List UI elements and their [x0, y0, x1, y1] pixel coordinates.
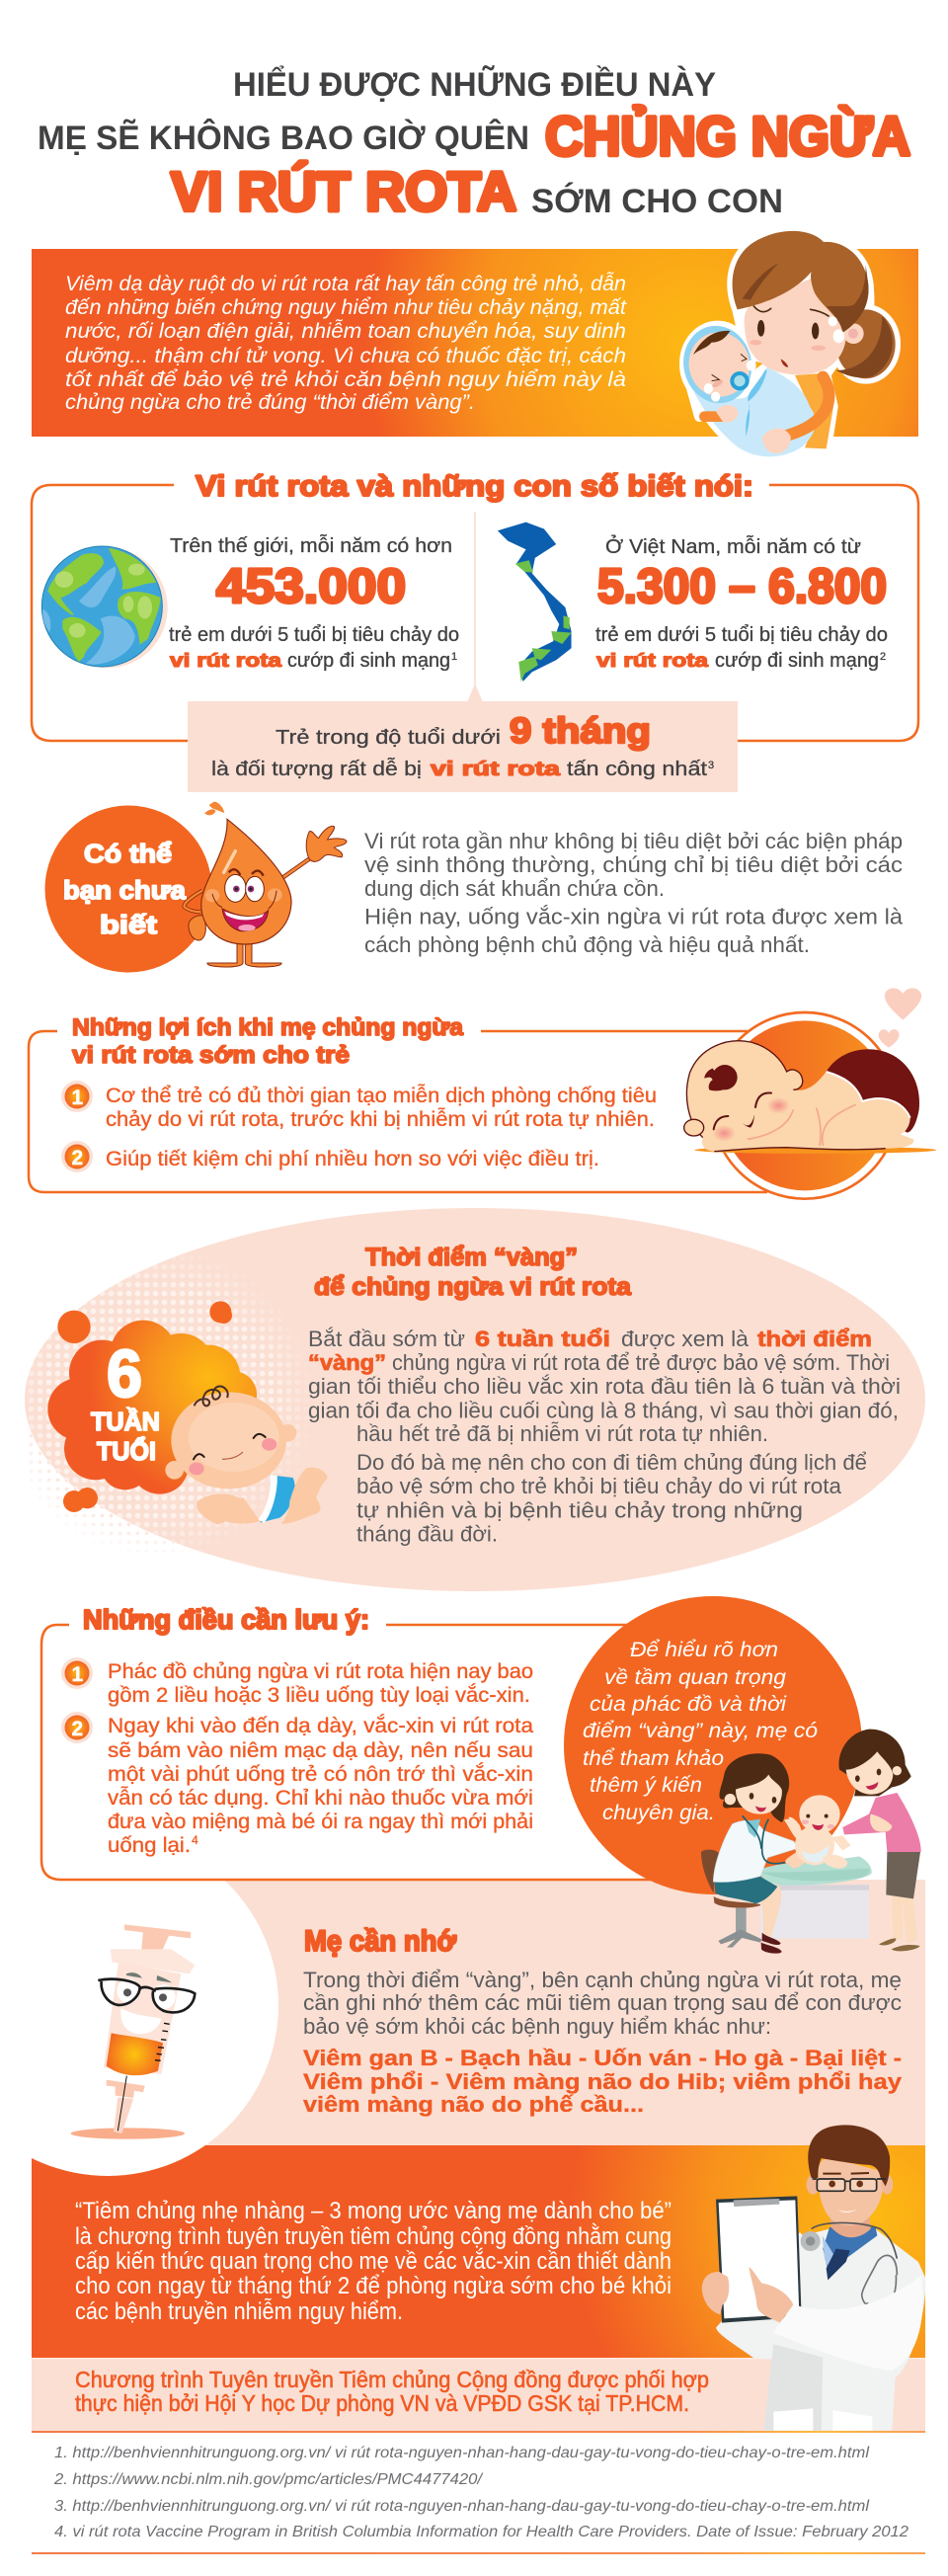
callout: 9 months: 9 tháng — [510, 710, 651, 751]
did-you-know text: dung dịch sát khuẩn chứa cồn. — [364, 876, 665, 901]
notes text: một vài phút uống trẻ có nôn trớ thì vắc-xin — [108, 1763, 533, 1786]
notes text: vẫn có tác dụng. Chỉ khi nào thuốc vừa mới — [108, 1787, 533, 1810]
callout: orange circle — [564, 1596, 862, 1894]
badge: 2: 2 — [71, 1147, 83, 1169]
remember text: Viêm phổi - Viêm màng não do Hib; viêm phổi hay — [303, 2069, 903, 2094]
map: Vietnam — [498, 523, 572, 682]
panel: did you know — [45, 802, 904, 972]
world statistic: Trên thế giới, mỗi năm có hơn — [170, 534, 452, 557]
programme description: các bệnh truyền nhiễm nguy hiểm. — [75, 2298, 403, 2325]
remember text: cần ghi nhớ thêm các mũi tiêm quan trọng sau để con được — [303, 1990, 902, 2015]
golden time text: tháng đầu đời. — [356, 1521, 498, 1547]
programme credit: Chương trình Tuyên truyền Tiêm chủng Cộng đồng được phối hợp — [75, 2367, 709, 2392]
programme description: cho con ngay từ tháng thứ 2 để phòng ngừa sớm cho bé khỏi — [75, 2273, 672, 2299]
icon: doctor with clipboard — [702, 2125, 925, 2431]
remember text: bảo vệ sớm khỏi các bệnh nguy hiểm khác như: — [303, 2014, 771, 2039]
world statistic: vi rút rota — [170, 650, 281, 672]
badge: 2 — [61, 1712, 93, 1743]
icon: orange cloud with 6 weeks and baby: 6 — [107, 1336, 142, 1411]
references — [53, 2445, 908, 2540]
golden time text: tự nhiên và bị bệnh tiêu chảy trong những — [356, 1497, 803, 1523]
callout: 9 months — [188, 684, 738, 792]
white circle behind syringe — [0, 1834, 278, 2176]
intro text: chủng ngừa cho trẻ đúng “thời điểm vàng”. — [65, 390, 475, 414]
benefit items: Cơ thể trẻ có đủ thời gian tạo miễn dịch phòng chống tiêu — [106, 1085, 657, 1107]
badge: 1 — [61, 1081, 93, 1112]
Vietnam statistic: trẻ em dưới 5 tuổi bị tiêu chảy do — [595, 623, 888, 646]
remember text: Mẹ cần nhớ — [304, 1925, 457, 1958]
callout: orange circle: của phác đồ và thời — [590, 1692, 787, 1716]
remember text — [303, 1925, 903, 2117]
golden time text: Do đó bà mẹ nên cho con đi tiêm chủng đúng lịch để — [356, 1450, 867, 1475]
world statistic: cướp đi sinh mạng — [287, 649, 450, 672]
remember text: Trong thời điểm “vàng”, bên cạnh chủng ngừa vi rút rota, mẹ — [303, 1968, 902, 1992]
callout: 9 months: 3 — [708, 760, 714, 771]
world statistic — [169, 534, 459, 672]
decorative halftone outside ellipse — [30, 1434, 183, 1553]
programme description — [75, 2198, 672, 2325]
notes text: 4 — [192, 1833, 198, 1847]
panel: intro banner — [32, 249, 918, 437]
title — [38, 66, 910, 222]
Vietnam statistic: vi rút rota — [596, 650, 708, 672]
intro text: tốt nhất để bảo vệ trẻ khỏi căn bệnh nguy hiểm này là — [65, 367, 626, 391]
benefits heading: Những lợi ích khi mẹ chủng ngừa — [72, 1014, 464, 1041]
callout: orange circle: thêm ý kiến — [590, 1773, 702, 1797]
golden time text: gian tối đa cho liều cuối cùng là 8 tháng, vì sau thời gian đó, — [308, 1399, 899, 1422]
programme description: “Tiêm chủng nhẹ nhàng – 3 mong ước vàng mẹ dành cho bé” — [75, 2198, 672, 2224]
callout: orange circle: về tầm quan trọng — [604, 1665, 786, 1689]
callout: 9 months: vi rút rota — [431, 759, 561, 780]
section heading: Vi rút rota và những con số biết nói: — [196, 470, 753, 503]
icon: mother holding crying baby — [676, 231, 896, 456]
badge: 2 — [61, 1141, 93, 1172]
title: SỚM CHO CON — [531, 183, 783, 220]
programme credit — [75, 2367, 709, 2416]
references: 1. http://benhviennhitrunguong.org.vn/ vi rút rota-nguyen-nhan-hang-dau-gay-tu-vong-do-tieu-chay-o-tre-em.html — [54, 2445, 869, 2461]
badge: 1: 1 — [71, 1663, 83, 1686]
bottom rule — [32, 2431, 925, 2433]
benefit items: chảy do vi rút rota, trước khi bị nhiễm vi rút rota tự nhiên. — [106, 1108, 655, 1131]
icon: sleeping baby with hearts — [684, 988, 936, 1199]
callout: 9 months: Trẻ trong độ tuổi dưới — [276, 726, 501, 749]
badge: 1 — [61, 1657, 93, 1689]
Vietnam statistic: 5.300 – 6.800 — [597, 560, 887, 613]
icon: earth globe — [41, 546, 168, 668]
intro text: Viêm dạ dày ruột do vi rút rota rất hay tấn công trẻ nhỏ, dẫn — [65, 271, 626, 295]
notes heading: Những điều cần lưu ý: — [83, 1604, 369, 1635]
icon: drop mascot — [184, 802, 347, 967]
notes text: uống lại. — [108, 1834, 191, 1857]
did-you-know text: Vi rút rota gần như không bị tiêu diệt bởi các biện pháp — [364, 829, 903, 853]
title: MẸ SẼ KHÔNG BAO GIỜ QUÊN — [38, 119, 529, 157]
golden time heading: để chủng ngừa vi rút rota — [314, 1273, 632, 1301]
Vietnam statistic: Ở Việt Nam, mỗi năm có từ — [605, 534, 861, 558]
benefits heading — [72, 1014, 464, 1069]
references: 4. vi rút rota Vaccine Program in British Columbia Information for Health Care Providers. Date of Issue: February 2012 — [54, 2524, 908, 2540]
intro text: đến những biến chứng nguy hiểm như tiêu chảy nặng, mất — [65, 295, 627, 319]
panel: golden time — [0, 1208, 925, 1591]
programme credit: thực hiện bởi Hội Y học Dự phòng VN và VPĐD GSK tại TP.HCM. — [75, 2390, 689, 2416]
callout: orange circle: điểm “vàng” này, mẹ có — [583, 1719, 818, 1742]
callout: orange circle: Để hiểu rõ hơn — [630, 1638, 778, 1661]
notes text: đưa vào miệng mà bé ói ra ngay thì mới phải — [108, 1811, 533, 1833]
icon: doctor, baby and mother — [701, 1730, 921, 1954]
panel: numbers that speak — [32, 470, 918, 792]
remember text: Viêm gan B - Bạch hầu - Uốn ván - Ho gà - Bại liệt - — [303, 2046, 902, 2070]
references: 2. https://www.ncbi.nlm.nih.gov/pmc/articles/PMC4477420/ — [53, 2471, 484, 2488]
icon: orange cloud with 6 weeks and baby: TUẦN — [91, 1407, 160, 1436]
icon: syringe mascot — [71, 1924, 195, 2139]
title: HIỂU ĐƯỢC NHỮNG ĐIỀU NÀY — [233, 66, 716, 104]
Vietnam statistic: 2 — [880, 651, 886, 663]
benefit items — [106, 1085, 657, 1170]
notes text: sẽ bám vào niêm mạc dạ dày, nên nếu sau — [108, 1739, 533, 1762]
panel: benefits — [29, 988, 936, 1199]
callout: orange circle: chuyên gia. — [602, 1801, 715, 1824]
golden time text: “vàng” — [308, 1350, 386, 1375]
Vietnam statistic — [595, 534, 888, 672]
references: 3. http://benhviennhitrunguong.org.vn/ vi rút rota-nguyen-nhan-hang-dau-gay-tu-vong-do-tieu-chay-o-tre-em.html — [54, 2498, 869, 2515]
golden time heading: Thời điểm “vàng” — [365, 1244, 578, 1271]
did-you-know text: cách phòng bệnh chủ động và hiệu quả nhất. — [364, 932, 810, 957]
golden time text: 6 tuần tuổi — [475, 1327, 610, 1351]
golden time text: gian tối thiểu cho liều vắc xin rota đầu tiên là 6 tuần và thời — [308, 1374, 901, 1399]
notes text — [108, 1660, 533, 1857]
did-you-know text: vệ sinh thông thường, chúng chỉ bị tiêu diệt bởi các — [364, 852, 903, 877]
golden time text: chủng ngừa vi rút rota để trẻ được bảo vệ sớm. Thời — [392, 1350, 890, 1375]
title: VI RÚT ROTA — [171, 160, 516, 222]
intro text: nước, rối loạn điện giải, nhiễm toan chuyển hóa, suy dinh — [65, 317, 626, 343]
panel: programme banner — [32, 2145, 925, 2431]
Vietnam statistic: cướp đi sinh mạng — [715, 649, 879, 672]
golden time text: Bắt đầu sớm từ — [308, 1327, 465, 1351]
callout: orange circle: thể tham khảo — [583, 1746, 724, 1770]
badge circle: Có thể — [84, 839, 172, 868]
icon: orange cloud with 6 weeks and baby: TUỔI — [97, 1436, 156, 1466]
icon: orange cloud with 6 weeks and baby — [47, 1301, 328, 1524]
intro text — [65, 271, 627, 414]
golden time heading — [314, 1244, 632, 1301]
golden time text: được xem là — [621, 1327, 750, 1351]
golden time text: hầu hết trẻ đã bị nhiễm vi rút rota tự nhiên. — [356, 1421, 768, 1446]
notes text: gồm 2 liều hoặc 3 liều uống tùy loại vắc-xin. — [108, 1684, 530, 1707]
badge: 2: 2 — [71, 1718, 83, 1740]
world statistic: 453.000 — [216, 560, 406, 613]
benefits heading: vi rút rota sớm cho trẻ — [72, 1042, 350, 1069]
golden time text: thời điểm — [757, 1327, 872, 1351]
did-you-know text — [364, 829, 904, 957]
badge: 1: 1 — [71, 1087, 83, 1109]
benefit items: Giúp tiết kiệm chi phí nhiều hơn so với việc điều trị. — [106, 1148, 599, 1170]
golden time text: bảo vệ sớm cho trẻ khỏi bị tiêu chảy do vi rút rota — [356, 1474, 842, 1498]
panel: remember — [32, 1880, 925, 2145]
notes text: Ngay khi vào đến dạ dày, vắc-xin vi rút rota — [108, 1715, 533, 1737]
programme description: cấp kiến thức quan trọng cho mẹ về các vắc-xin cần thiết dành — [75, 2248, 672, 2275]
panel: notes — [41, 1604, 652, 1880]
remember text: viêm màng não do phế cầu... — [303, 2092, 644, 2117]
notes text: Phác đồ chủng ngừa vi rút rota hiện nay bao — [108, 1660, 533, 1683]
badge circle — [45, 806, 211, 972]
world statistic: trẻ em dưới 5 tuổi bị tiêu chảy do — [169, 623, 459, 646]
badge circle: bạn chưa — [63, 875, 187, 905]
golden time text — [308, 1327, 901, 1547]
callout: 9 months: tấn công nhất — [567, 758, 707, 780]
programme description: là chương trình tuyên truyền tiêm chủng cộng đồng nhằm cung — [75, 2223, 672, 2250]
badge circle: biết — [100, 910, 157, 939]
world statistic: 1 — [451, 651, 457, 663]
intro text: dưỡng... thậm chí tử vong. Vì chưa có thuốc đặc trị, cách — [65, 344, 626, 367]
callout: 9 months: là đối tượng rất dễ bị — [211, 758, 422, 780]
did-you-know text: Hiện nay, uống vắc-xin ngừa vi rút rota được xem là — [364, 905, 904, 928]
title: CHỦNG NGỪA — [545, 105, 910, 167]
